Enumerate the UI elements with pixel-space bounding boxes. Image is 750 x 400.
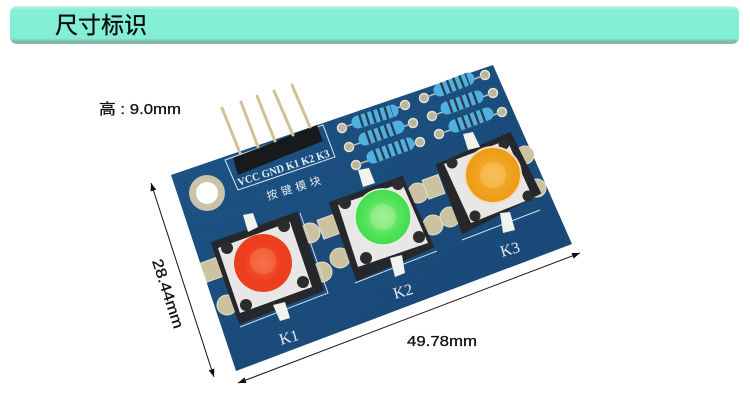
K1 label: K1 <box>277 327 301 349</box>
arrow: board width dimension <box>238 253 580 383</box>
silkscreen button outlines <box>240 210 540 327</box>
K2 label: K2 <box>391 281 415 303</box>
resistor right group <box>420 70 506 138</box>
silkscreen pin labels: VCC GND K1 K2 K3 <box>236 148 332 189</box>
push button K1 <box>212 213 323 349</box>
pin header <box>222 85 323 175</box>
push button K3 <box>437 132 540 261</box>
board body <box>171 65 572 371</box>
height label: 高 : 9.0mm <box>99 101 181 118</box>
resistor left group <box>338 100 424 170</box>
green LED <box>355 189 411 245</box>
header bar <box>10 6 739 44</box>
red LED <box>234 234 292 292</box>
depth label: 28.44mm <box>148 257 187 331</box>
amber LED <box>465 147 521 203</box>
silkscreen pin labels <box>225 125 335 203</box>
arrow: board depth dimension <box>151 183 214 377</box>
title: 尺寸标识 <box>55 12 147 38</box>
solder pads <box>200 146 546 315</box>
silkscreen pin labels: 按键模块 <box>265 172 326 203</box>
width label: 49.78mm <box>407 333 477 350</box>
push button K2 <box>330 168 433 303</box>
resistors <box>338 70 506 170</box>
circuit board module <box>171 65 572 371</box>
mounting hole <box>189 175 225 211</box>
K3 label: K3 <box>498 239 522 261</box>
